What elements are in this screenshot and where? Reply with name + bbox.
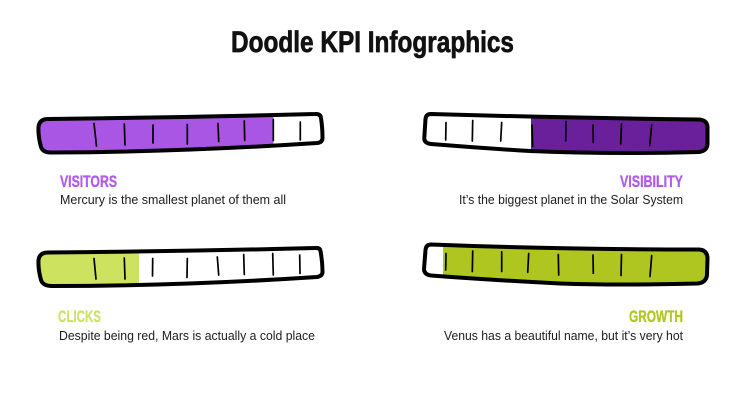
label: visitors: VISITORS [60, 173, 117, 191]
panel: growth [424, 244, 708, 343]
label: clicks: CLICKS [58, 308, 101, 326]
panel: clicks [38, 248, 323, 343]
description: visibility: It’s the biggest planet in the Solar System [459, 193, 683, 207]
label: visibility: VISIBILITY [620, 173, 683, 191]
panel: visibility [424, 114, 708, 207]
description: visitors: Mercury is the smallest planet of them all [60, 193, 286, 207]
panel: visitors [38, 114, 323, 207]
title: Doodle KPI Infographics [231, 26, 514, 59]
infographic canvas [36, 30, 710, 342]
progress bar: visitors [38, 114, 323, 153]
label: growth: GROWTH [629, 308, 683, 326]
progress bar: clicks [38, 248, 323, 286]
description: clicks: Despite being red, Mars is actually a cold place [59, 329, 315, 343]
progress bar: visibility [424, 114, 708, 153]
progress bar: growth [424, 244, 708, 284]
description: growth: Venus has a beautiful name, but it’s very hot [444, 329, 684, 343]
